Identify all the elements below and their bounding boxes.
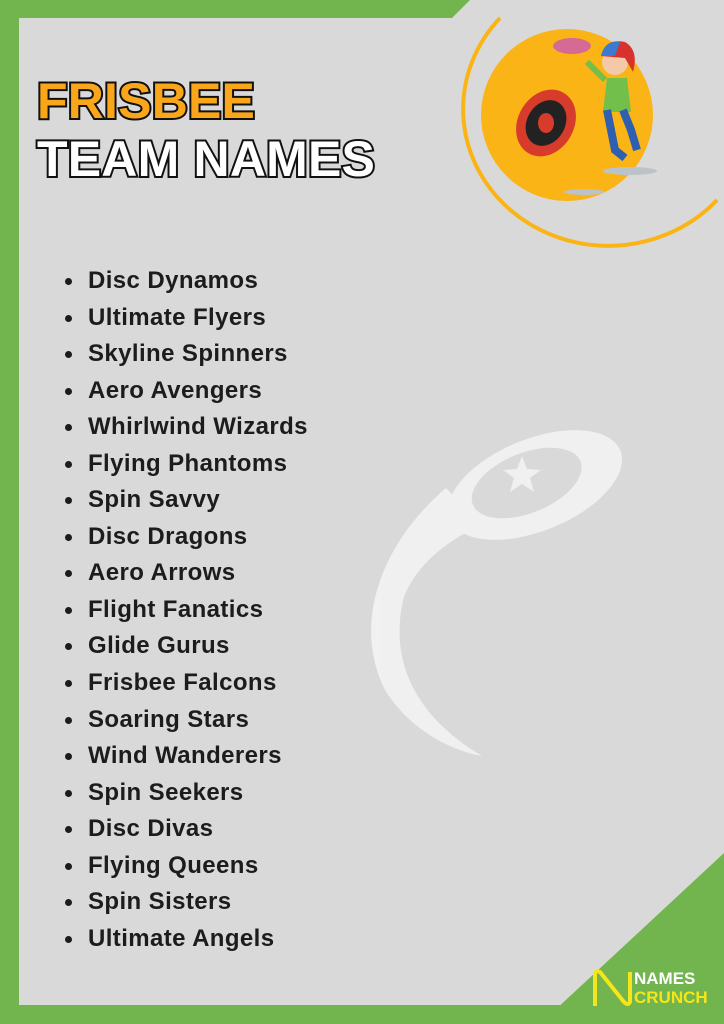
- illustration: girl with frisbees: [461, 16, 718, 248]
- list of names: Aero Arrows: [88, 559, 236, 586]
- list of names: Whirlwind Wizards: [88, 413, 308, 440]
- list of names: Spin Sisters: [88, 888, 232, 915]
- logo: Names Crunch: NAMES: [634, 969, 695, 988]
- list of names: Wind Wanderers: [88, 742, 282, 769]
- list of names: Glide Gurus: [88, 632, 230, 659]
- list of names: Spin Savvy: [88, 486, 220, 513]
- title: TEAM NAMES: TEAM NAMES: [37, 131, 375, 187]
- logo: Names Crunch: CRUNCH: [634, 988, 708, 1007]
- list of names: Flying Queens: [88, 852, 259, 879]
- list of names: Disc Dynamos: [88, 267, 258, 294]
- list of names: Ultimate Flyers: [88, 304, 266, 331]
- list of names: Flying Phantoms: [88, 450, 287, 477]
- list of names: Aero Avengers: [88, 377, 262, 404]
- title: FRISBEE: FRISBEE: [37, 73, 255, 129]
- list of names: Ultimate Angels: [88, 925, 274, 952]
- list of names: Skyline Spinners: [88, 340, 288, 367]
- list of names: Frisbee Falcons: [88, 669, 277, 696]
- list of names: [65, 267, 308, 952]
- logo: Names Crunch: [593, 969, 708, 1007]
- list of names: Disc Dragons: [88, 523, 248, 550]
- list of names: Flight Fanatics: [88, 596, 263, 623]
- list of names: Spin Seekers: [88, 779, 244, 806]
- list of names: Soaring Stars: [88, 706, 249, 733]
- list of names: Disc Divas: [88, 815, 213, 842]
